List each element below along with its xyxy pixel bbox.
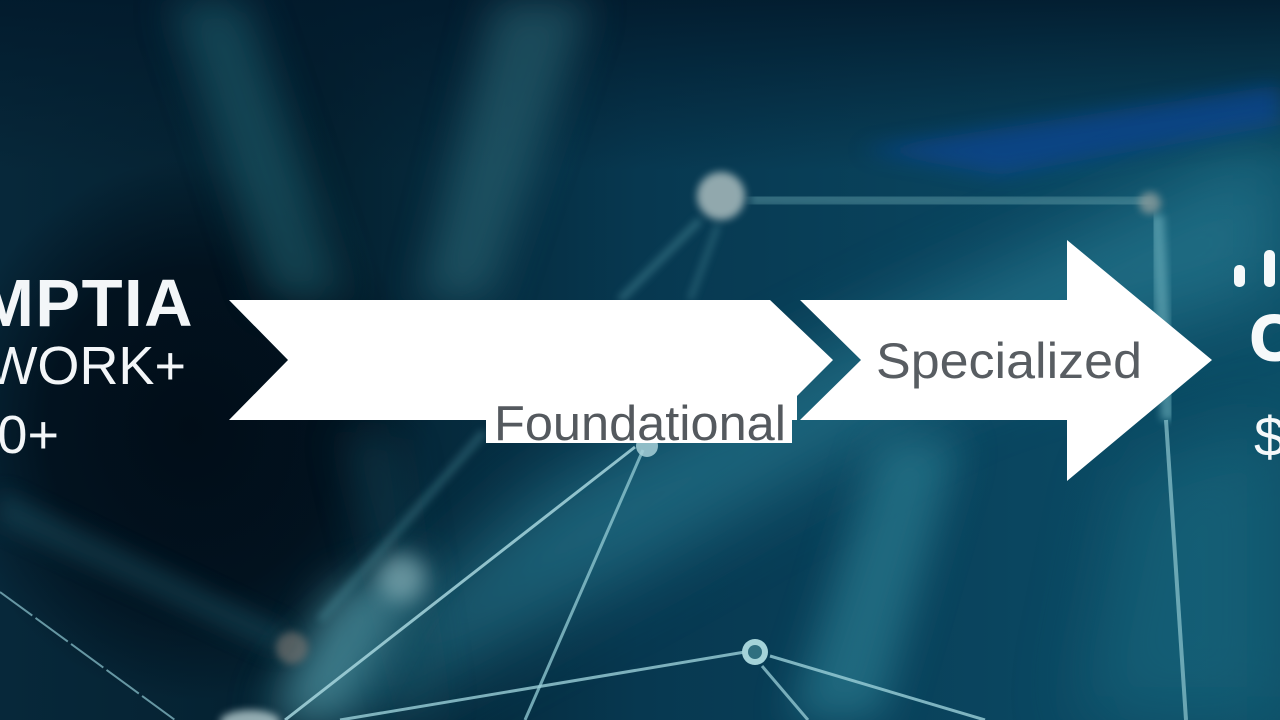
specialized arrow bbox=[800, 240, 1212, 481]
foundational chevron arrow bbox=[229, 300, 833, 451]
right entry: Cisco bbox=[1234, 250, 1280, 468]
specialized label: Specialized bbox=[876, 333, 1142, 389]
foundational label: Foundational bbox=[494, 397, 786, 451]
icon: Cisco bars bbox=[1234, 250, 1275, 287]
network lines and nodes bbox=[0, 172, 1280, 720]
left entry: CompTIA Network+ bbox=[0, 266, 194, 465]
